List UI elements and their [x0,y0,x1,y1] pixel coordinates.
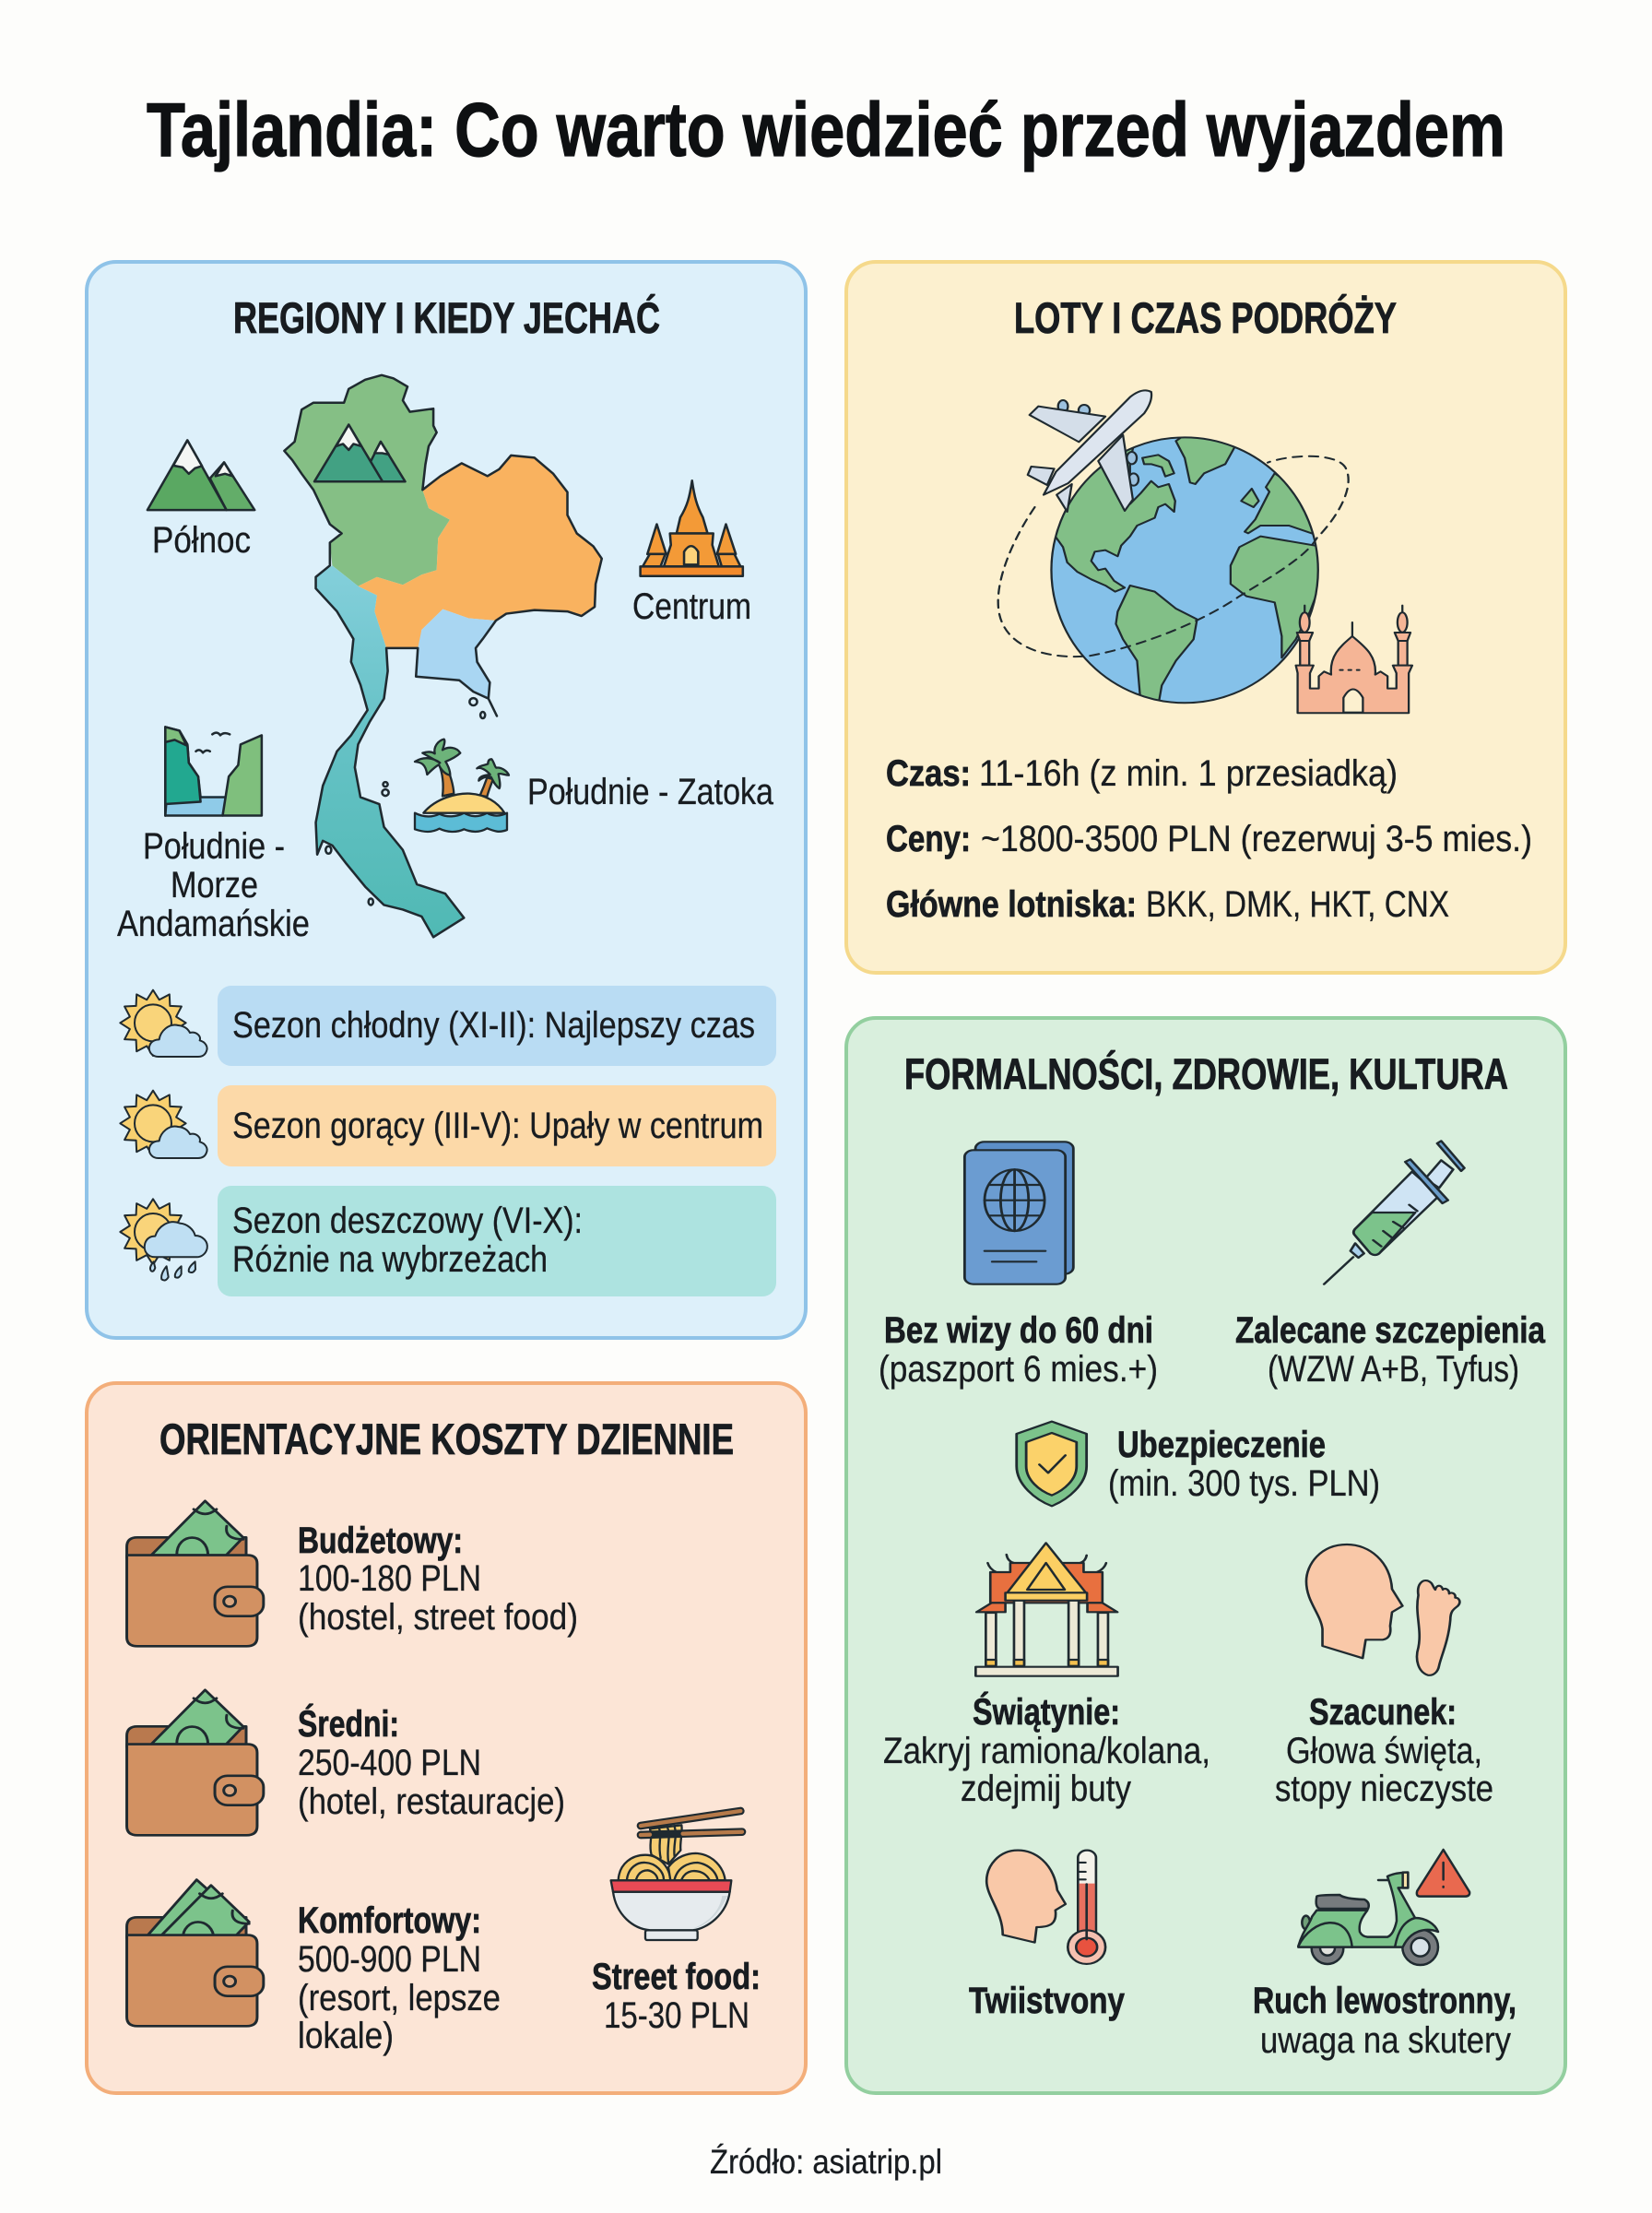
text: budget: (hostel, street food) [298,1597,578,1638]
label: south Andaman Sea [117,826,310,944]
label: centre: Centrum [632,586,751,627]
icon: sun and cloud [120,1091,207,1158]
text: mid: Średni: [298,1702,399,1745]
icon: temple [975,1543,1118,1676]
panel: regions and when to go [87,262,806,1338]
text: insurance: (min. 300 tys. PLN) [1108,1463,1380,1504]
text: left traffic [1253,1981,1516,2061]
info: time: Czas: [886,753,971,794]
text: insurance: Ubezpieczenie [1117,1425,1326,1465]
text: budget: Budżetowy: [298,1521,463,1561]
icon: shield [1017,1422,1087,1506]
text: temples [883,1690,1210,1809]
info: prices: ~1800-3500 PLN (rezerwuj 3-5 mies.) [981,819,1532,859]
text: vaccinations [1235,1310,1546,1390]
label: south Andaman Sea: Południe - [143,826,285,867]
heading: costs: ORIENTACYJNE KOSZTY DZIENNIE [159,1414,734,1463]
text: temples: zdejmij buty [961,1769,1131,1809]
text: no visa [879,1310,1158,1390]
text: comfort: 500-900 PLN [298,1939,481,1980]
info: airports: Główne lotniska: [886,884,1137,925]
info: prices: Ceny: [886,819,971,859]
text: respect: Głowa święta, [1286,1731,1482,1771]
icon: sun, rain cloud [120,1199,207,1281]
text: street food [592,1957,761,2036]
info: time: 11-16h (z min. 1 przesiadką) [979,753,1398,794]
text: budget [298,1521,578,1638]
icon: head and foot [1306,1544,1459,1675]
season: rainy: Różnie na wybrzeżach [232,1239,548,1280]
icon: central temple [641,480,743,576]
text: mid: 250-400 PLN [298,1743,481,1783]
icon: head and thermometer [986,1851,1105,1964]
season: cool: Sezon chłodny (XI-II): Najlepszy czas [232,1005,755,1046]
icon: north mountains [148,441,254,510]
text: comfort [298,1900,501,2056]
text: vaccinations: Zalecane szczepienia [1235,1310,1546,1351]
label: south Gulf: Południe - Zatoka [527,772,774,812]
icon: wallet comfort [127,1880,264,2026]
label: south Andaman Sea: Morze [171,865,258,905]
text: street food: Street food: [592,1957,761,1997]
heading: flights: LOTY I CZAS PODRÓŻY [1014,293,1397,342]
info: airports: BKK, DMK, HKT, CNX [1146,884,1449,925]
icon: wallet mid [127,1690,264,1835]
icon: wallet budget [127,1501,264,1646]
season: rainy: Sezon deszczowy (VI-X): [232,1201,583,1241]
icon: sun and cloud [120,990,207,1057]
icon: gulf island [415,740,509,832]
text: respect [1275,1692,1493,1809]
season: hot [120,1085,776,1166]
season: hot: Sezon gorący (III-V): Upały w centrum [232,1106,763,1146]
text: budget: 100-180 PLN [298,1558,481,1599]
season: rainy [120,1186,776,1296]
label: south Andaman Sea: Andamańskie [117,904,310,944]
text: mid [298,1702,565,1822]
icon: syringe [1324,1141,1464,1284]
panel: formalities, health, culture [846,1018,1565,2093]
text: temples: Świątynie: [973,1690,1120,1733]
source note: Źródło: asiatrip.pl [710,2143,942,2181]
map of Thailand [284,375,602,937]
text: vaccinations: (WZW A+B, Tyfus) [1268,1349,1519,1390]
heading: regions: REGIONY I KIEDY JECHAĆ [233,293,660,342]
text: hot: Twiistvony [969,1981,1126,2021]
text: temples: Zakryj ramiona/kolana, [883,1731,1210,1771]
season: cool [120,986,776,1066]
label: north: Północ [152,520,251,561]
info: airports [886,884,1449,925]
text: left traffic: Ruch lewostronny, [1253,1981,1516,2021]
text: no visa: Bez wizy do 60 dni [884,1310,1153,1351]
text: respect: Szacunek: [1309,1692,1457,1733]
text: comfort: Komfortowy: [298,1900,481,1941]
icon: Andaman cliffs [165,727,262,815]
icon: passport [964,1142,1073,1284]
text: mid: (hotel, restauracje) [298,1781,565,1822]
icon: scooter and warning [1298,1850,1469,1965]
text: respect: stopy nieczyste [1275,1769,1493,1809]
text: street food: 15-30 PLN [604,1995,749,2036]
text: comfort: (resort, lepsze [298,1978,501,2018]
icon: noodle bowl [611,1811,742,1940]
text: left traffic: uwaga na skutery [1260,2020,1511,2061]
text: comfort: lokale) [298,2016,394,2056]
text: no visa: (paszport 6 mies.+) [879,1349,1158,1390]
panel: flights and travel time [846,262,1565,973]
panel: daily costs [87,1383,806,2093]
icon: globe with plane and mosque [998,390,1412,713]
text: insurance [1108,1425,1380,1504]
